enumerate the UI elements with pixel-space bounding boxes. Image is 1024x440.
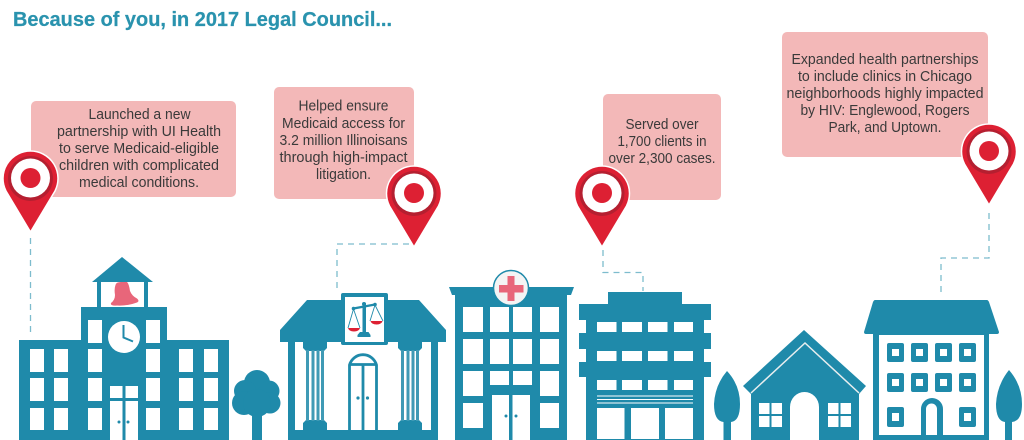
callout 1: Launched a new: [88, 107, 191, 123]
title: Because of you, in 2017 Legal Council...: [13, 8, 392, 31]
callout 4: neighborhoods highly impacted: [786, 86, 984, 102]
callout 3: Served over: [626, 117, 699, 133]
door: [350, 355, 376, 430]
callout 1: to serve Medicaid-eligible: [59, 141, 219, 157]
door: [921, 398, 943, 435]
callout 2: litigation.: [316, 167, 371, 183]
icon: pointed tree left: [714, 371, 740, 440]
callout 1: partnership with UI Health: [57, 124, 221, 140]
callout 2: Helped ensure: [298, 98, 388, 114]
columns: [303, 342, 422, 430]
icon: map pin 2: [386, 166, 442, 247]
callout 4: to include clinics in Chicago: [798, 69, 972, 85]
icon: courthouse: [280, 293, 446, 440]
callout 4: Expanded health partnerships: [792, 52, 978, 68]
callout 4: by HIV: Englewood, Rogers: [800, 103, 970, 119]
callout 2: Medicaid access for: [282, 116, 405, 132]
callout 3: [603, 94, 721, 200]
dashed connector 1: [30, 238, 32, 334]
callout 4: Park, and Uptown.: [828, 120, 942, 136]
icon: office building: [579, 292, 711, 440]
door: [110, 386, 138, 440]
icon: map pin 4: [962, 124, 1016, 205]
sign with scales of justice: [341, 293, 388, 345]
icon: house: [743, 330, 866, 440]
callout 2: [274, 87, 414, 199]
icon: school building with clock tower: [19, 257, 229, 440]
icon: medical cross: [494, 270, 528, 306]
dashed connector 4: [941, 213, 989, 295]
callout 1: [31, 101, 236, 197]
callout 1: medical conditions.: [79, 175, 199, 191]
callout 2: 3.2 million Illinoisans: [280, 133, 408, 149]
icon: round tree: [232, 370, 280, 440]
callout 2: through high-impact: [280, 150, 408, 166]
callout 3: 1,700 clients in: [618, 134, 706, 150]
callout 3: over 2,300 cases.: [608, 151, 716, 167]
dashed connector 2: [337, 244, 415, 288]
icon: pointed tree right: [996, 370, 1022, 440]
icon: bell: [111, 282, 138, 306]
door: [492, 395, 530, 440]
icon: map pin 3: [574, 166, 630, 247]
dashed connector 3: [603, 250, 643, 291]
icon: clock: [108, 321, 140, 353]
icon: map pin 1: [3, 151, 58, 232]
callout 1: children with complicated: [59, 158, 219, 174]
icon: hospital: [449, 270, 574, 440]
callout 4: [782, 32, 988, 157]
icon: apartment building: [864, 300, 999, 440]
